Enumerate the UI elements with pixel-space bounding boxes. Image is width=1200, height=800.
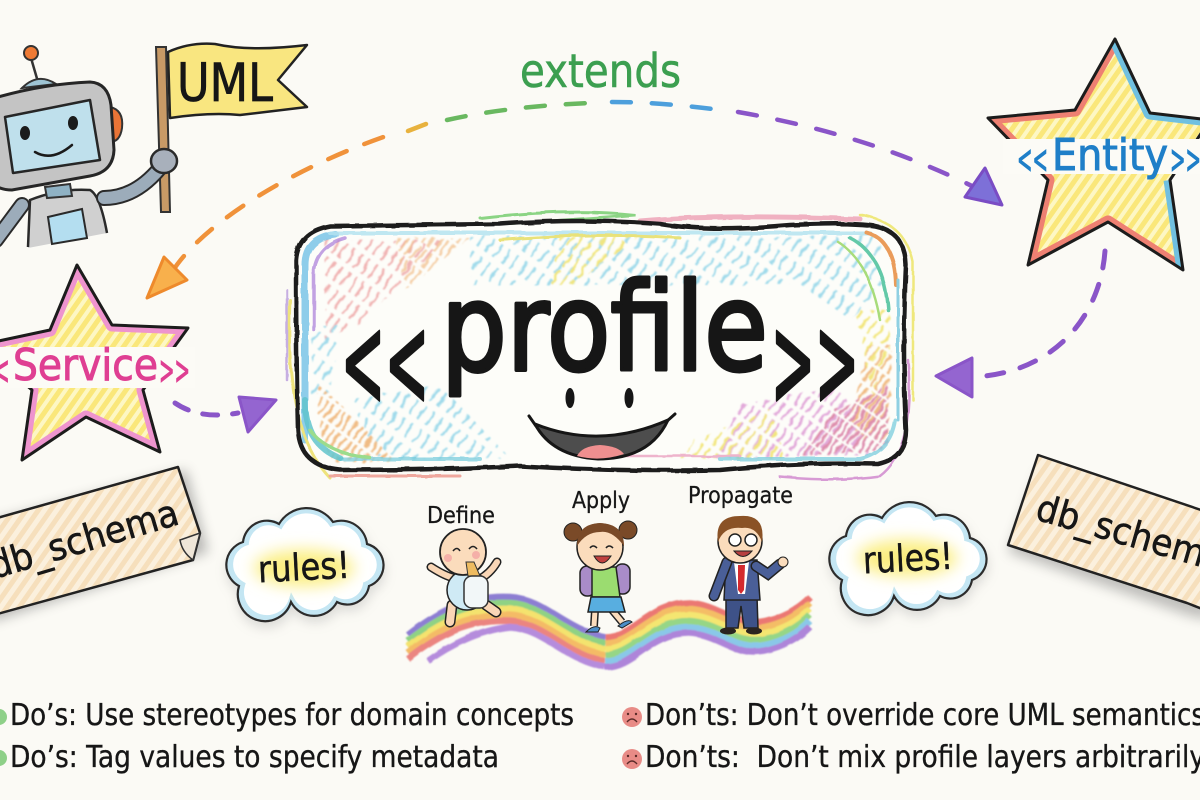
star: Entity: [988, 39, 1200, 270]
star: Entity: <<: [1017, 137, 1048, 183]
cloud: rules left: [226, 508, 385, 627]
star: Service: [0, 265, 195, 460]
arms: [0, 168, 160, 240]
head: [0, 82, 114, 190]
note: db_schema left: [0, 467, 208, 622]
icon: red frown: [622, 707, 642, 769]
stage: baby Define: [427, 503, 497, 622]
smiley face: [529, 388, 675, 459]
rainbow path: [408, 597, 810, 667]
don'ts list: [622, 698, 1200, 775]
star: Entity: Entity: [1052, 130, 1168, 181]
stage: man Propagate: Propagate: [688, 483, 793, 509]
arrow: Entity to profile: [936, 251, 1105, 397]
title: profile: [341, 259, 859, 437]
cloud: rules right: rules!: [862, 535, 954, 582]
hand: [151, 149, 177, 173]
do's list: [0, 698, 574, 775]
central profile box: >>: [771, 288, 859, 437]
label: extends: extends: [520, 44, 681, 98]
cloud: rules right: [829, 502, 988, 621]
robot holding UML flag: [0, 44, 307, 248]
stage: child Apply: Apply: [572, 488, 630, 514]
flag: UML: [177, 53, 273, 114]
antenna: [22, 46, 56, 88]
ear: [110, 107, 122, 142]
note: db_schema right: [1008, 455, 1200, 620]
icon: green smiley: [0, 709, 7, 766]
stage: man Propagate: [688, 483, 793, 634]
cloud: rules left: rules!: [257, 544, 351, 591]
star: Service: >>: [159, 348, 190, 394]
do's list: Do’s: Use stereotypes for domain concepts: [10, 698, 574, 733]
flag: [156, 44, 307, 212]
star: Service: Service: [13, 340, 158, 391]
do's list: Do’s: Tag values to specify metadata: [10, 740, 499, 775]
central profile box: [287, 212, 913, 479]
arrow: Service to profile: [175, 397, 276, 432]
title: profile: profile: [441, 259, 768, 400]
stage: child Apply: [564, 488, 637, 632]
arrow: extends arc: [147, 102, 1002, 298]
stage: baby Define: Define: [427, 503, 495, 529]
title: profile: <<: [341, 288, 429, 437]
body: [28, 184, 107, 248]
